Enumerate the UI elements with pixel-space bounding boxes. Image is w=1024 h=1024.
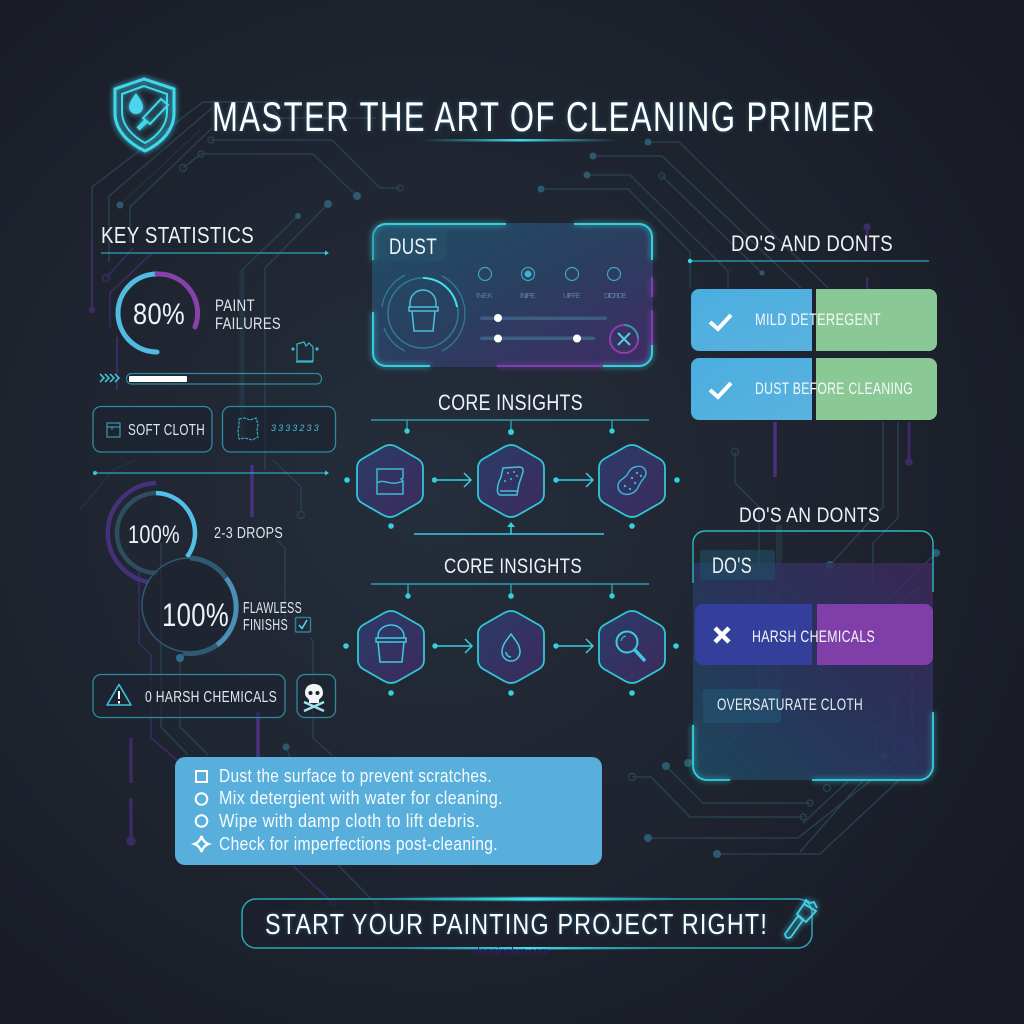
heading: CORE INSIGHTS (438, 390, 583, 415)
card: mild detergent (691, 289, 937, 351)
step 2: Mix detergient with water for cleaning. (219, 788, 503, 808)
gauge: 100 percent drops: 100% (128, 521, 180, 549)
bar: harsh chemicals (695, 604, 933, 665)
heading: DO'S AN DONTS (739, 504, 880, 527)
tab: oversaturate cloth: OVERSATURATE CLOTH (717, 696, 863, 714)
chip: zero harsh chemicals (93, 674, 285, 718)
chip: zero harsh chemicals: 0 HARSH CHEMICALS (145, 689, 277, 706)
progress bar (100, 374, 322, 384)
panel: do's an donts bottom (693, 504, 933, 780)
arrows and node dots (343, 639, 679, 696)
label: flawless finish: FLAWLESS (243, 600, 302, 617)
watermark: cleaningbro.com (472, 946, 550, 958)
gauge: 100 percent finish (142, 558, 236, 662)
card: dust before cleaning: DUST BEFORE CLEANING (755, 379, 913, 398)
icon: close button (610, 325, 638, 353)
hexagon: cloth (357, 445, 423, 517)
connector rail (371, 420, 649, 435)
radio options (476, 268, 627, 300)
panel: steps list (175, 757, 602, 865)
circuit background lines (80, 102, 940, 908)
cta text: START YOUR PAINTING PROJECT RIGHT! (265, 909, 768, 941)
heading rule (688, 259, 929, 263)
tab: oversaturate cloth (703, 689, 863, 723)
call to action (242, 898, 817, 950)
label: 2-3 drops: 2-3 DROPS (214, 525, 283, 542)
chip: soft cloth (93, 406, 212, 452)
panel frame top (693, 531, 933, 592)
radio options: UIFFE (563, 291, 581, 300)
step 3: Wipe with damp cloth to lift debris. (219, 811, 480, 831)
heading: key statistics: KEY STATISTICS (101, 222, 254, 248)
chip: cloth swatch: 3333233 (271, 423, 319, 433)
icon: torn paint can (292, 342, 318, 362)
dust tab (372, 227, 447, 261)
card: dust before cleaning (691, 358, 937, 420)
chip: soft cloth: SOFT CLOTH (128, 422, 205, 439)
panel: dust (372, 223, 653, 367)
gauge: 80 percent: 80% (133, 298, 185, 331)
gauge: 80 percent (118, 274, 198, 352)
icon: paint brush (785, 900, 817, 938)
section: core insights top (344, 390, 680, 534)
label: paint failures: PAINT (215, 296, 255, 315)
step 4: Check for imperfections post-cleaning. (219, 834, 498, 854)
tab: do's (700, 550, 775, 580)
divider with dots (93, 470, 329, 476)
label: flawless finish: FINISHS (243, 617, 288, 634)
label: flawless finish (243, 600, 302, 634)
sliders (480, 314, 607, 342)
gauge: 100 percent finish: 100% (162, 597, 229, 633)
chip: skull icon (297, 674, 336, 718)
panel frame bottom (693, 712, 933, 780)
icon: shield logo (115, 79, 174, 151)
chip: cloth swatch (222, 406, 336, 452)
hexagon: scrubber (599, 445, 665, 517)
panel: do's and donts top (688, 231, 937, 420)
panel: key statistics (93, 222, 336, 718)
title underline glow (420, 139, 620, 142)
hexagon: bucket (358, 611, 424, 683)
hexagon: sponge (478, 445, 544, 517)
step 1: Dust the surface to prevent scratches. (219, 766, 492, 786)
heading rule (101, 250, 329, 256)
card: mild detergent: MILD DETEREGENT (755, 310, 881, 329)
heading: CORE INSIGHTS (444, 555, 582, 578)
hexagon: water drop (478, 611, 544, 683)
gauge: 100 percent drops (108, 483, 195, 582)
dust tab: DUST (389, 234, 437, 259)
icon: checkbox (296, 618, 310, 632)
radio options: DIIORDE (604, 291, 627, 300)
label: paint failures: FAILURES (215, 314, 281, 333)
heading: DO'S AND DONTS (731, 231, 893, 256)
cta glow bottom (400, 947, 660, 950)
tab: do's: DO'S (712, 553, 752, 578)
arrows and node dots (344, 473, 680, 534)
panel frame (373, 224, 652, 366)
panel body (693, 563, 933, 780)
icon: bucket dial (382, 275, 465, 351)
bar: harsh chemicals: HARSH CHEMICALS (752, 628, 875, 646)
connector rail (371, 584, 649, 599)
hexagon: magnifier (599, 611, 665, 683)
radio options: INIPE (520, 291, 536, 300)
cta glow top (380, 898, 680, 900)
radio options: INEK (476, 291, 493, 300)
label: paint failures (215, 296, 281, 333)
section: core insights bottom (343, 555, 679, 696)
